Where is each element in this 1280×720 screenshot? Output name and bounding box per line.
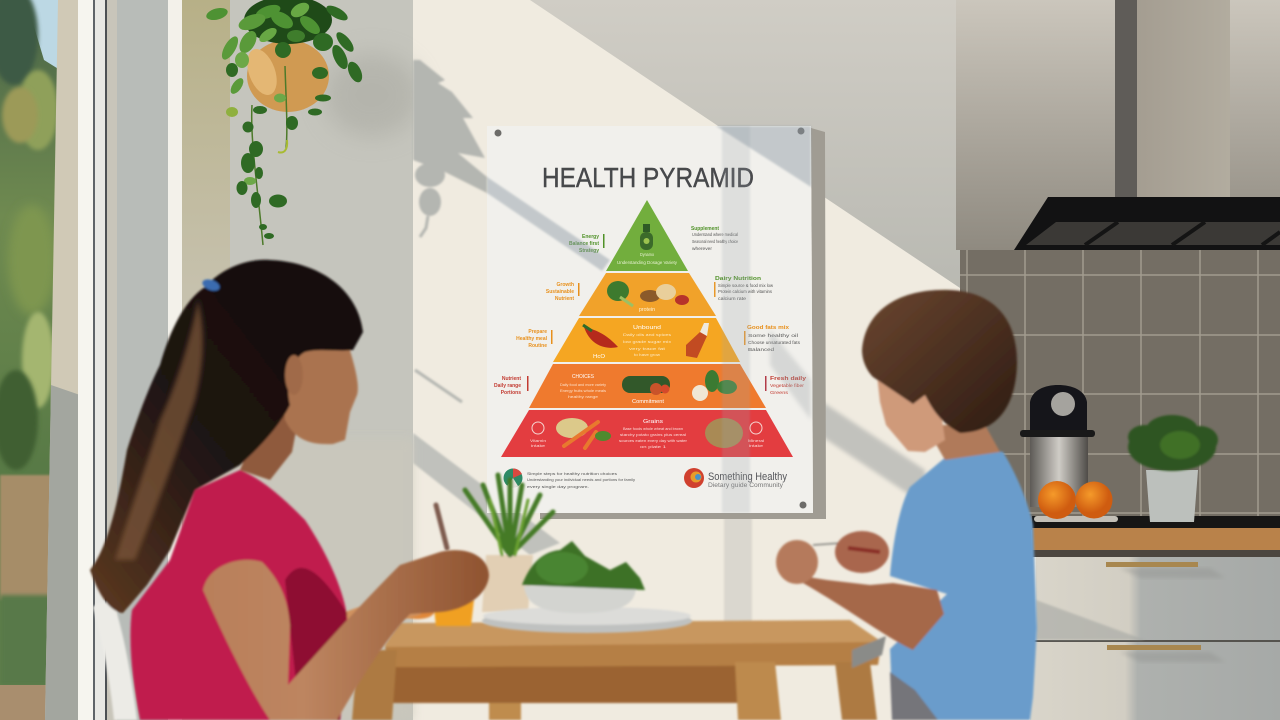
left labels <box>494 234 604 396</box>
tier 3: low grade sugar mix <box>623 339 671 344</box>
oranges <box>1038 481 1112 519</box>
left labels: Nutrient <box>555 296 574 302</box>
tier 5: intake <box>749 444 763 448</box>
right labels <box>691 226 806 395</box>
chair <box>93 602 137 720</box>
poster board <box>487 126 813 513</box>
tier 3: to have grow <box>634 352 660 357</box>
counter and cabinets <box>1030 516 1280 720</box>
poster title: HEALTH PYRAMID <box>542 162 754 193</box>
tier 4: Commitment <box>632 399 665 405</box>
coffee machine <box>1020 385 1118 522</box>
tier 1: Understanding Dosage Variety <box>617 260 678 265</box>
left labels: Daily range <box>494 383 521 389</box>
right labels: Vegetable fiber <box>770 383 805 388</box>
pyramid <box>501 200 793 457</box>
dining table <box>352 620 886 720</box>
tier 5: Grains <box>643 419 664 425</box>
tier 3: Daily oils and spices <box>623 332 671 337</box>
neck <box>240 410 300 480</box>
footer left <box>504 468 635 489</box>
right labels: Supplement <box>691 226 719 232</box>
right labels: Greens <box>770 390 789 395</box>
tier 2: protein <box>639 307 655 313</box>
tier 3: very trace fat <box>629 346 666 351</box>
table underside <box>390 665 740 703</box>
arm <box>203 550 489 720</box>
left labels: Energy <box>582 234 599 240</box>
tier 5: Mineral <box>748 439 764 443</box>
tier 3 <box>553 318 740 362</box>
window frame <box>45 0 117 720</box>
table items <box>402 475 692 633</box>
right labels: Simple source & food mix low <box>718 283 774 288</box>
yellow cup and fork <box>402 505 474 626</box>
tier 5: Base foods whole wheat and brown <box>623 426 683 431</box>
hanging plant <box>205 0 365 245</box>
tier 2 <box>579 273 716 316</box>
light and shadow bands on poster <box>487 126 811 513</box>
tier 4: CHOICES <box>572 374 595 380</box>
face <box>877 370 945 452</box>
blue shirt <box>890 451 1037 720</box>
grey pants <box>890 672 938 720</box>
tier 5: on plate 1 <box>640 444 667 449</box>
tier 3: HcO <box>593 354 605 360</box>
boy figure <box>776 290 1037 720</box>
neck <box>925 425 1000 460</box>
tier 5: starchy potato grains plus cereal <box>620 432 686 437</box>
face <box>283 335 358 444</box>
window garden view <box>0 0 60 720</box>
left labels: Routine <box>528 343 547 349</box>
right labels: Dairy Nutrition <box>715 276 761 282</box>
tier 4: Daily food and more variety <box>560 382 606 387</box>
right labels: Choose unsaturated fats <box>748 340 801 345</box>
table top <box>385 620 882 667</box>
right labels: wherever <box>692 246 713 251</box>
red shirt <box>130 470 350 720</box>
tier 3: Unbound <box>633 325 661 331</box>
tiled backsplash <box>960 250 1280 530</box>
left labels: Growth <box>556 282 574 288</box>
hair <box>862 290 1017 433</box>
tier 4: Energy fruits whole meals <box>560 388 606 393</box>
footer left: Understanding your individual needs and portions for family <box>527 477 635 482</box>
footer left: Simple steps for healthy nutrition choices <box>527 471 617 476</box>
right labels: Balanced <box>748 347 775 352</box>
footer right <box>684 468 787 489</box>
woman figure <box>90 260 489 720</box>
tier 5: sources eaten every day with water <box>619 438 688 443</box>
hair highlight <box>115 300 203 560</box>
left labels: Sustainable <box>546 289 574 295</box>
right labels: Good fats mix <box>747 325 789 331</box>
far forearm <box>345 592 430 635</box>
left labels: Strategy <box>579 248 599 254</box>
potted kitchen plant <box>1128 415 1218 522</box>
tier 1: Dynamo <box>640 252 654 257</box>
tier 5: intake <box>531 444 545 448</box>
plate and salad bowl <box>482 541 692 633</box>
footer right: Something Healthy <box>708 471 787 483</box>
grey table side <box>852 636 886 668</box>
footer right: Dietary guide Community <box>708 482 784 489</box>
poster shadow <box>540 128 826 519</box>
right labels: Protein calcium with vitamins <box>718 289 773 294</box>
hair and ponytail <box>90 260 363 613</box>
hanging plant shadow on wall <box>413 60 487 402</box>
right labels: Seasonal need healthy choice <box>692 239 738 244</box>
hands and utensil <box>776 531 889 584</box>
right labels: calcium rate <box>718 296 747 301</box>
footer left: every single day program. <box>527 484 589 489</box>
ear <box>285 355 303 395</box>
tier 5 <box>501 410 793 457</box>
tier 4: healthy range <box>568 394 599 399</box>
left labels: Prepare <box>528 329 547 335</box>
plant pot <box>247 40 329 112</box>
tier 4 <box>529 364 766 408</box>
kitchen wall and hood <box>956 0 1280 250</box>
left labels: Portions <box>501 390 521 396</box>
poster <box>487 126 826 519</box>
right labels: Fresh daily <box>770 376 806 382</box>
left labels: Nutrient <box>502 376 521 382</box>
left labels: Balance first <box>569 241 599 247</box>
poster screws <box>494 128 806 508</box>
boy arm <box>795 575 944 650</box>
right labels: Understand where medical <box>692 232 738 237</box>
tier 1 <box>606 200 688 271</box>
table legs <box>352 650 397 720</box>
tier 5: Vitamin <box>530 439 546 443</box>
hair tie <box>201 277 221 293</box>
potted grass <box>465 475 553 612</box>
right labels: Some healthy oil <box>748 333 798 338</box>
left labels: Healthy meal <box>516 336 548 342</box>
